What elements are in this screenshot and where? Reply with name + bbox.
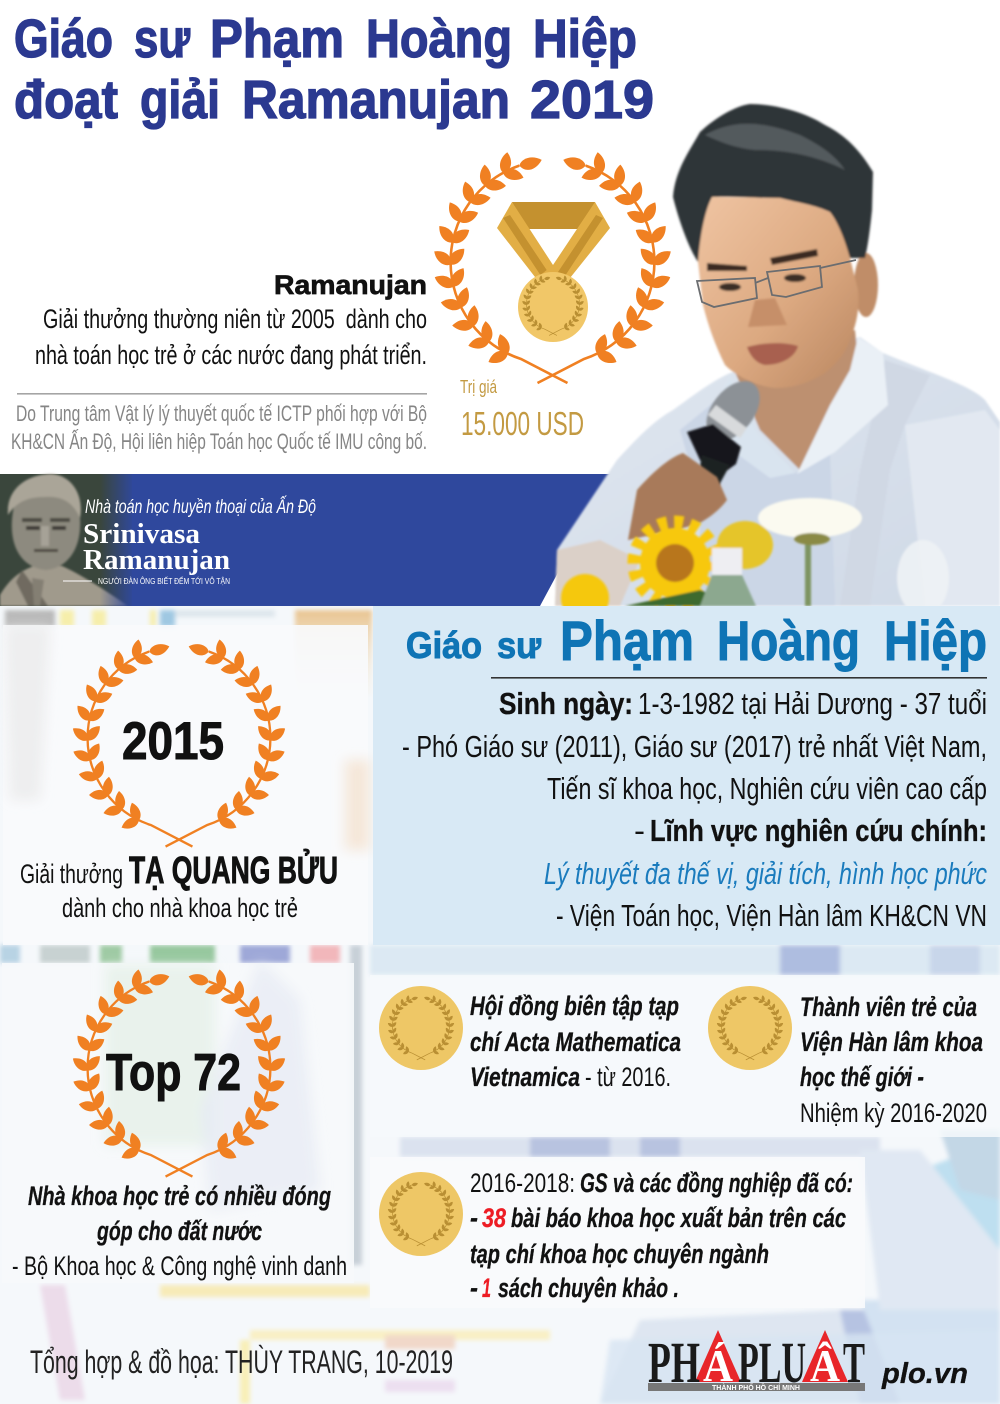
text block: Ramanujan prize description [35, 270, 427, 370]
icon: medal disc [518, 272, 588, 342]
award: 2015 Ta Quang Buu: Giải thưởng [20, 859, 123, 889]
item: Acta Mathematica editorial board: Vietnamica [470, 1062, 580, 1092]
text block: prize organisers [11, 401, 427, 454]
title: Phạm [210, 9, 344, 69]
banner text: Srinivasa [83, 518, 201, 550]
icon: gold medal [379, 1172, 463, 1256]
eyes [719, 283, 741, 291]
item: publications 2016-2018: 38 [482, 1203, 506, 1233]
item: Acta Mathematica editorial board: Hội đồng biên tập tạp [470, 991, 679, 1021]
award: 2015 Ta Quang Buu [20, 634, 338, 923]
text block: Ramanujan prize description: Ramanujan [274, 270, 427, 300]
left top panel [3, 625, 368, 945]
text block: Ramanujan prize description: Giải thưởng thường niên từ 2005 dành cho [43, 304, 427, 334]
title: Ramanujan [242, 70, 510, 130]
item: Acta Mathematica editorial board [379, 986, 681, 1092]
item: publications 2016-2018: - [470, 1203, 478, 1233]
prize value: Trị giá [460, 377, 498, 397]
banner: Srinivasa Ramanujan [0, 474, 611, 606]
award: Top 72 [12, 964, 347, 1281]
hand [628, 453, 727, 540]
website: plo.vn [881, 1358, 968, 1390]
heading: name: Hoàng [717, 609, 860, 672]
item: publications 2016-2018: bài báo khoa học xuất bản trên các [511, 1203, 846, 1233]
item: Acta Mathematica editorial board: chí Acta Mathematica [470, 1027, 681, 1057]
award: Top 72: - Bộ Khoa học & Công nghệ vinh danh [12, 1251, 347, 1281]
hair [673, 104, 873, 262]
item: publications 2016-2018: - [470, 1273, 478, 1303]
title [14, 9, 654, 130]
glasses [697, 260, 856, 307]
photo: Professor Pham Hoang Hiep at microphone [555, 104, 1000, 622]
photo: statue of Ramanujan [0, 474, 134, 606]
banner text [63, 496, 316, 586]
title: sư [134, 9, 191, 69]
item: young member of world academy: học thế giới - [800, 1062, 924, 1092]
item: Acta Mathematica editorial board: - từ 2016. [585, 1062, 671, 1092]
logo: Phap Luat: THÀNH PHỐ HỒ CHÍ MINH [712, 1382, 800, 1392]
title: đoạt [14, 70, 118, 130]
panel: profile [373, 606, 1000, 945]
shirt [555, 337, 1000, 606]
eyebrows [707, 263, 747, 271]
item: publications 2016-2018 [379, 1168, 853, 1303]
title: Giáo [14, 9, 113, 69]
icon: gold medal [379, 986, 463, 1070]
text block: Ramanujan prize description: nhà toán học trẻ ở các nước đang phát triển. [35, 340, 427, 370]
profile details [402, 686, 987, 933]
lower right panels [370, 975, 1000, 1137]
award: Top 72: Nhà khoa học trẻ có nhiều đóng [28, 1181, 331, 1211]
heading: name: Phạm [560, 609, 694, 672]
heading: name: Giáo [406, 625, 482, 666]
logo: Phap Luat: Á [703, 1340, 733, 1391]
award: 2015 Ta Quang Buu: dành cho nhà khoa học trẻ [62, 893, 298, 923]
item: publications 2016-2018: sách chuyên khảo . [498, 1273, 679, 1303]
profile details: - [634, 813, 645, 848]
soft tint in left panels [5, 625, 370, 1210]
award: Top 72: Top 72 [106, 1044, 241, 1102]
profile details: Sinh ngày: [499, 686, 633, 721]
icon: gold medal [708, 986, 792, 1070]
banner text: Ramanujan [83, 544, 230, 576]
text block: prize organisers: KH&CN Ấn Độ, Hội liên hiệp Toán học Quốc tế IMU công bố. [11, 429, 427, 454]
prize value [460, 377, 584, 442]
microphone [687, 371, 770, 498]
banner text: Nhà toán học huyền thoại của Ấn Độ [85, 496, 316, 518]
item: young member of world academy [708, 986, 987, 1128]
title: Hiệp [533, 9, 637, 69]
logo: Phap Luat: PLU [738, 1330, 806, 1395]
award: 2015 Ta Quang Buu: 2015 [122, 712, 224, 771]
face [698, 197, 859, 388]
item: publications 2016-2018: GS và các đồng nghiệp đã có: [580, 1168, 853, 1198]
background: pale blurred maths texture [0, 606, 1000, 1404]
heading: name: sư [497, 625, 541, 666]
mouth [747, 343, 798, 365]
banner text: NGƯỜI ĐÀN ÔNG BIẾT ĐẾM TỚI VÔ TẬN [98, 576, 230, 586]
left lower panel [2, 963, 354, 1283]
icon: orange laurel wreath with gold medal [430, 147, 675, 383]
logo: Phap Luat [648, 1330, 865, 1395]
logo: Phap Luat: Â [810, 1340, 840, 1391]
flowers and bottles [561, 498, 949, 622]
heading: name [406, 609, 987, 672]
credit: Tổng hợp & đồ họa: THÙY TRANG, 10-2019 [30, 1344, 453, 1380]
icon: medal ribbon [497, 202, 610, 283]
title: giải [140, 70, 220, 130]
logo: Phap Luat: T [843, 1330, 865, 1395]
text block: prize organisers: Do Trung tâm Vật lý lý thuyết quốc tế ICTP phối hợp với Bộ [16, 401, 427, 426]
award: Top 72: góp cho đất nước [96, 1216, 262, 1246]
ear [854, 253, 878, 317]
logo: Phap Luat: PH [648, 1330, 700, 1395]
title: Hoàng [366, 9, 512, 69]
item: publications 2016-2018: 1 [482, 1273, 491, 1303]
title: 2019 [530, 70, 654, 130]
neck [735, 330, 862, 470]
nose shade [748, 298, 787, 327]
prize value: 15.000 USD [461, 405, 584, 442]
award: 2015 Ta Quang Buu: TẠ QUANG BỬU [129, 848, 338, 892]
item: publications 2016-2018: tạp chí khoa học chuyên ngành [470, 1239, 769, 1269]
collar [797, 337, 888, 474]
item: publications 2016-2018: 2016-2018: [470, 1168, 575, 1198]
